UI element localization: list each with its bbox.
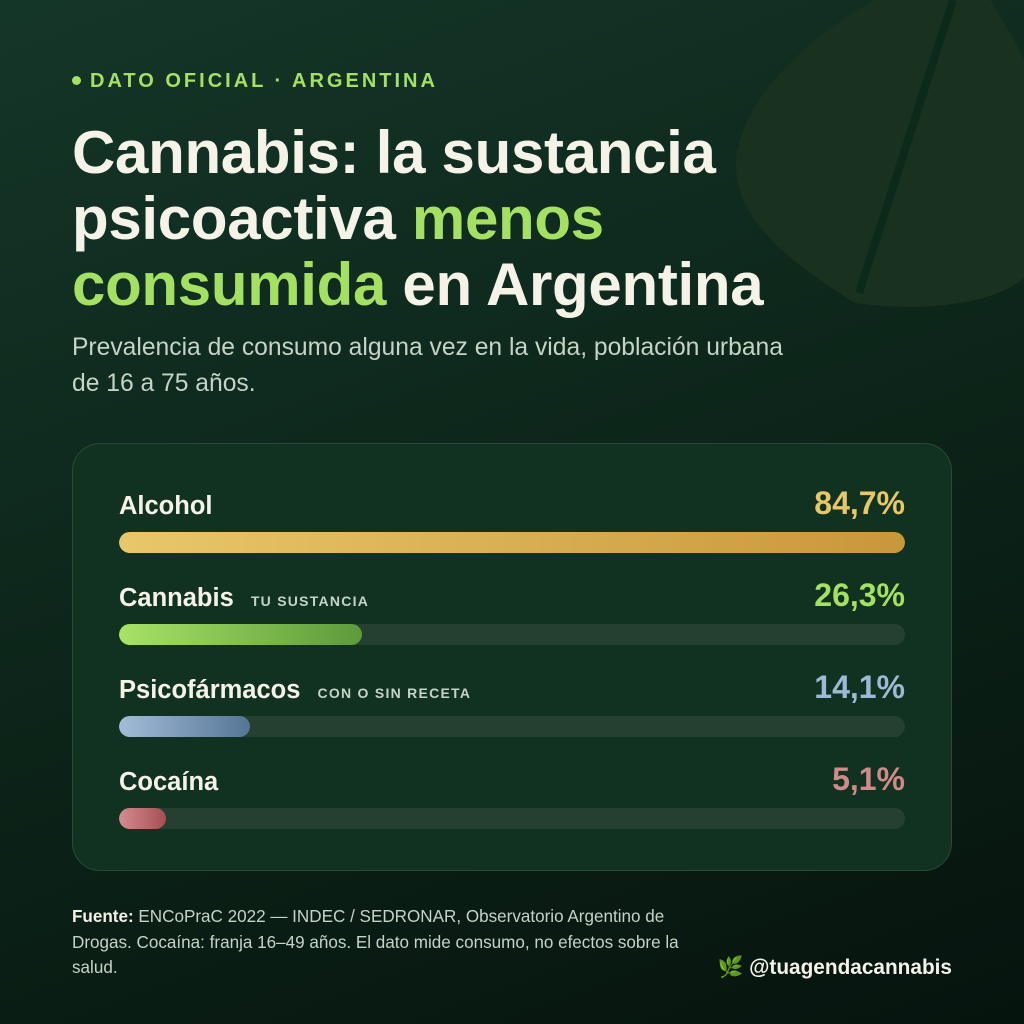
row: Psicofármacos xyxy=(119,669,905,737)
title: Cannabis: la sustancia xyxy=(72,119,716,186)
eyebrow label: DATO OFICIAL · ARGENTINA xyxy=(90,70,438,92)
bar: Cocaína xyxy=(119,808,905,829)
title: consumida en Argentina xyxy=(72,251,763,318)
label: Alcohol: Alcohol xyxy=(119,492,212,520)
row: Alcohol xyxy=(119,485,905,553)
brand handle: 🌿 @tuagendacannabis xyxy=(717,956,952,979)
label: Psicofármacos: Psicofármacos CON O SIN RECETA xyxy=(119,676,471,704)
row: Cocaína xyxy=(119,761,905,829)
value: Cannabis: 26,3% xyxy=(814,577,905,613)
label: Cannabis: Cannabis TU SUSTANCIA xyxy=(119,584,369,612)
panel: bar chart card xyxy=(72,443,952,871)
subtitle xyxy=(72,334,783,397)
title: psicoactiva menos xyxy=(72,185,604,252)
value: Cocaína: 5,1% xyxy=(832,761,905,797)
value: Psicofármacos: 14,1% xyxy=(814,669,905,705)
label: Cocaína: Cocaína xyxy=(119,768,218,796)
source footnote: Drogas. Cocaína: franja 16–49 años. El dato mide consumo, no efectos sobre la xyxy=(72,932,679,952)
bar: Alcohol xyxy=(119,532,905,553)
title xyxy=(72,119,764,318)
subtitle: Prevalencia de consumo alguna vez en la vida, población urbana xyxy=(72,334,783,361)
row: Cannabis xyxy=(119,577,905,645)
bar: Psicofármacos xyxy=(119,716,905,737)
bar: Cannabis xyxy=(119,624,905,645)
subtitle: de 16 a 75 años. xyxy=(72,370,256,397)
source footnote xyxy=(72,907,679,977)
source footnote: salud. xyxy=(72,958,118,977)
source footnote: Fuente: ENCoPraC 2022 — INDEC / SEDRONAR, Observatorio Argentino de xyxy=(72,907,664,926)
value: Alcohol: 84,7% xyxy=(814,485,905,521)
